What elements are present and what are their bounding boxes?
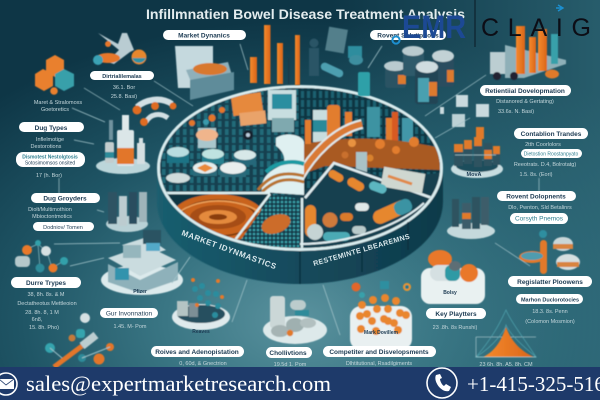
- icon: gut shape: [132, 100, 176, 126]
- label: distributionals: Dirtrialilemalas: [102, 74, 142, 80]
- icon: email: [0, 373, 17, 395]
- icon: vials on tray: [451, 127, 503, 178]
- label: drug types: [16, 122, 85, 179]
- wall ribs: [300, 222, 408, 284]
- label: retiential development: Distanored & Gertating): [496, 99, 554, 105]
- label: retiential development: [480, 85, 571, 115]
- label: chollutions: [266, 347, 312, 368]
- chart: orange peak: [476, 310, 536, 357]
- label: revent developments: Corsyth Pnemos: [515, 216, 564, 222]
- pie dividers: [158, 193, 302, 252]
- icon: small cubes: [440, 95, 489, 127]
- label: contabiion trends: 2tth Coorlolors: [525, 142, 561, 148]
- label: drug types: Sotosimomsos onsited: [25, 160, 75, 166]
- label: roives and adenopistation: Reaves: [192, 329, 210, 335]
- icon: syringe molecule: [45, 313, 114, 367]
- icon: test tube and dishes: [519, 230, 580, 274]
- segment: upper right orange pills: [298, 85, 445, 190]
- icon: hexagons: [35, 55, 74, 95]
- icon: stacked vials left: [106, 192, 148, 232]
- label: revent developments: [497, 191, 576, 224]
- logo: CLAIG: CLAIG: [481, 14, 591, 42]
- label: key players: 23 .8h. 8s Runshi): [433, 325, 477, 331]
- label: gut innovation: Pfizer: [133, 289, 147, 295]
- label: durre types: Durre Trypes: [26, 280, 66, 287]
- wall text: resteminte: RESTEMINTE LBEAREMNS: [312, 232, 411, 268]
- hub blob: [258, 135, 304, 195]
- label: drug groups: Mbioctontmotics: [32, 214, 72, 220]
- email address: sales@expertmarketresearch.com: [26, 371, 332, 396]
- label: contabiion trends: 1.5. 8s. (Eori): [519, 172, 553, 178]
- label: contabiion trends: Dietostion Roostanpyato: [524, 152, 578, 158]
- label: roives and adenopistation: [151, 329, 244, 367]
- label: competitor and developments: Dlhtitutional, Rsadilgiments: [346, 361, 412, 367]
- label: retiential development: Retientiial Dovelopmation: [485, 88, 565, 95]
- label: distributionals: 25.8. Basi): [111, 94, 137, 100]
- label: durre types: [11, 277, 81, 331]
- wall text: market dynamics: MARKET IDYNMASTICS: [180, 228, 278, 271]
- text: chart caption: 23 6h. 8h. A5. 8h. CM: [479, 362, 533, 368]
- text: mova: MovA: [467, 172, 482, 178]
- icon: boxes platform: [101, 230, 183, 295]
- label: key players: Key Playtters: [435, 311, 477, 318]
- icon: truck: [490, 26, 566, 80]
- label: recent adoption: [370, 30, 446, 40]
- label: drug types: Dismotest Nestolgtosis: [22, 154, 78, 160]
- label: durre types: 28. 8h. 8, 1 M: [25, 310, 59, 316]
- label: regulator: Marhon Duclorotocies: [521, 298, 579, 304]
- logo: EMR: EMR: [402, 9, 466, 45]
- icon: molecule left: [15, 240, 68, 272]
- label: key players: [426, 290, 486, 331]
- label: regulator: Regislatter Ploowens: [517, 279, 583, 286]
- label: drug groups: Dug Groyders: [43, 196, 87, 202]
- icon: bar chart top: [250, 25, 300, 85]
- label: drug groups: Dodniov/ Tomen: [43, 225, 83, 231]
- label: gut innovation: Gur Invonnation: [106, 310, 153, 318]
- pie face: [157, 85, 443, 251]
- label: revent developments: Rovent Dolopnents: [506, 194, 566, 200]
- title: Infillmnatien Bowel Disease Treatment Analysis: [146, 7, 465, 22]
- label: recent adoption: Rovent Solutiptions: [377, 32, 439, 40]
- text: market stratoions: Goetoretics: [41, 107, 69, 113]
- segment: capsules: [300, 162, 445, 250]
- pie wall: [157, 168, 443, 284]
- icon: capsules platform: [263, 296, 327, 344]
- label: contabiion trends: [514, 128, 588, 178]
- label: drug types: Dug Types: [35, 125, 68, 132]
- icon: capsules chunk right: [421, 250, 485, 304]
- label: revent developments: Dlo, Pwnton, Sld Betalinrs: [508, 205, 572, 211]
- text: market stratoions: [34, 100, 82, 113]
- icon: airplane molecules: [93, 33, 146, 65]
- icon: orange pile: [350, 281, 412, 350]
- label: durre types: 6n8,: [32, 317, 43, 323]
- label: contabiion trends: Reeotrats. D.4, Bolrotatg): [514, 162, 576, 168]
- label: chollutions: Chollivtions: [269, 350, 307, 357]
- label: regulator: 18.3. 8s. Penn: [532, 309, 568, 315]
- segment: dots: [240, 194, 300, 248]
- footer band: [0, 367, 600, 400]
- icon: medicine bottles: [96, 115, 150, 174]
- label: roives and adenopistation: 0, 60d, & Gnectrion: [179, 361, 227, 367]
- label: market dynamics: Market Dynanics: [178, 32, 230, 40]
- icon: report box: [175, 46, 234, 100]
- label: durre types: 38, 8h. 8s. & M: [28, 292, 65, 298]
- icon: jars: [384, 46, 454, 104]
- label: competitor and developments: Competiter and Disvelopsments: [329, 349, 429, 356]
- label: regulator: (Colomon Mosmion): [525, 319, 575, 325]
- label: distributionals: 36.1. Bor: [113, 85, 135, 91]
- label: drug types: 17 (h. Bor): [36, 173, 62, 179]
- icon: tablets and people: [309, 27, 370, 96]
- label: drug groups: Diolt/Multimothion: [28, 207, 72, 213]
- label: distributionals: [90, 71, 154, 100]
- connector lines: [54, 44, 539, 335]
- label: market dynamics: [163, 30, 246, 40]
- label: retiential development: 33.6s. N. Basi): [498, 109, 534, 115]
- label: contabiion trends: Contablion Trandes: [521, 131, 582, 138]
- tube: [299, 124, 362, 178]
- label: roives and adenopistation: Roives and Adenopistation: [155, 349, 239, 356]
- label: gut innovation: [100, 289, 158, 330]
- central pie chart: [155, 85, 445, 284]
- label: competitor and developments: Mark Dovillem: [364, 330, 399, 336]
- label: drug groups: [28, 193, 100, 231]
- icon: vials and dots platform: [172, 278, 230, 330]
- segment: upper left tablets: [158, 85, 303, 195]
- label: durre types: Dectatheotus Mettleoion: [17, 301, 77, 307]
- label: gut innovation: 1.45. M- Pom: [113, 324, 147, 330]
- label: durre types: 15. 8h. Pho): [29, 325, 59, 331]
- icon: phone: [427, 368, 457, 398]
- icon: vials right: [447, 197, 495, 239]
- label: regulator: [508, 276, 592, 325]
- label: competitor and developments: [323, 330, 436, 367]
- segment: coil: [168, 194, 272, 240]
- label: chollutions: 19.5d 1. Pom: [274, 362, 307, 368]
- label: drug types: Destorotions: [31, 144, 62, 150]
- label: drug types: Inflelmotige: [36, 137, 64, 143]
- text: market stratoions: Maret & Stralomoxs: [34, 100, 82, 106]
- label: key players: Bolsy: [443, 290, 457, 296]
- logo divider: [474, 0, 476, 47]
